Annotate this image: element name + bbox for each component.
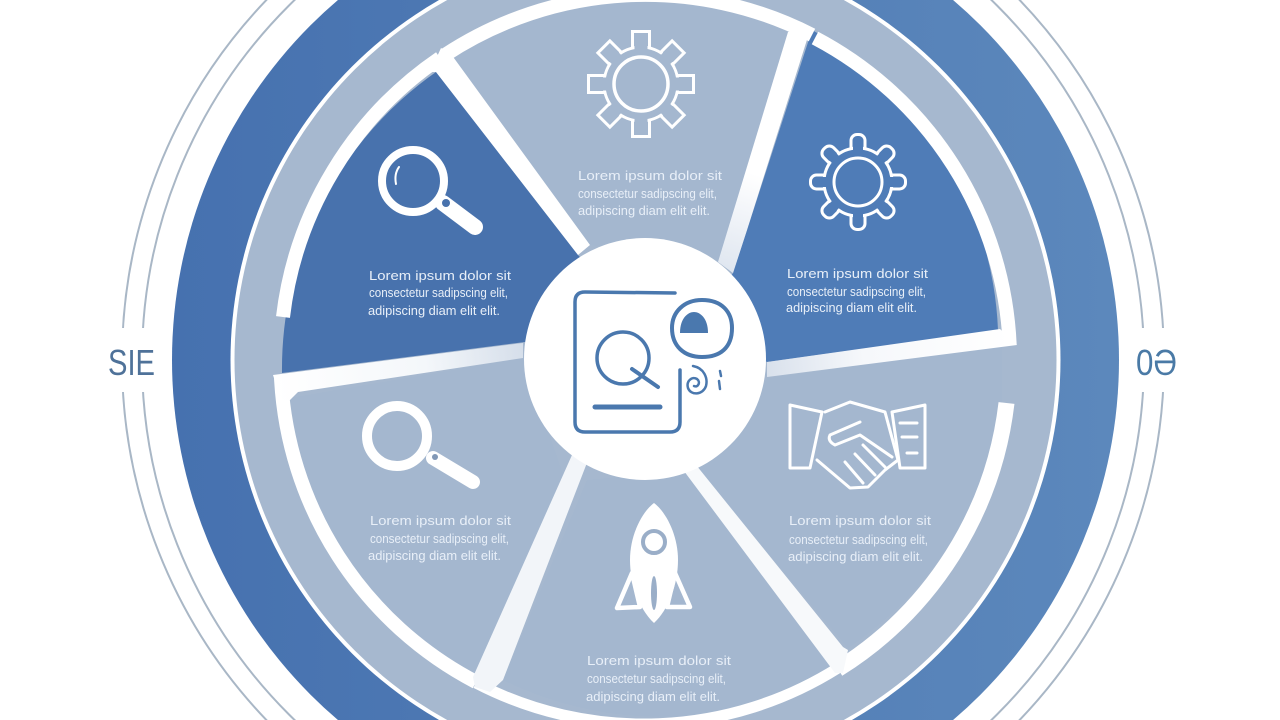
panel: bottom segment bbox=[503, 470, 835, 717]
segment outline arcs bbox=[281, 0, 1010, 720]
text block: top bbox=[578, 168, 722, 218]
text block: top left: adipiscing diam elit elit. bbox=[368, 303, 500, 318]
icon: outline gear bbox=[588, 32, 694, 136]
white hairline ring bbox=[230, 0, 1060, 720]
text block: lower left: adipiscing diam elit elit. bbox=[368, 548, 501, 563]
text block: top left: consectetur sadipscing elit, bbox=[369, 285, 508, 300]
icon: magnifying glass bbox=[382, 150, 475, 227]
blue outer ring bbox=[172, 0, 1119, 720]
text block: top right: Lorem ipsum dolor sit bbox=[787, 266, 928, 281]
panel: top left segment bbox=[282, 72, 620, 373]
text block: lower left: Lorem ipsum dolor sit bbox=[370, 513, 511, 528]
text block: bottom bbox=[586, 653, 731, 704]
text block: lower right: adipiscing diam elit elit. bbox=[788, 549, 923, 564]
text block: lower right bbox=[788, 513, 931, 564]
segment dividers bbox=[273, 27, 1017, 692]
text block: top left: Lorem ipsum dolor sit bbox=[369, 268, 511, 283]
right label: 0Ə bbox=[1136, 342, 1177, 383]
left label: SIE bbox=[108, 342, 155, 383]
panel: top segment bbox=[450, 0, 788, 262]
centre hub bbox=[524, 238, 766, 480]
text block: lower left bbox=[368, 513, 511, 563]
text block: bottom: adipiscing diam elit elit. bbox=[586, 689, 720, 704]
text block: bottom: consectetur sadipscing elit, bbox=[587, 671, 726, 686]
text block: top right bbox=[786, 266, 928, 315]
text block: lower right: consectetur sadipscing elit, bbox=[789, 532, 928, 547]
text block: lower left: consectetur sadipscing elit, bbox=[370, 531, 509, 546]
text block: top right: consectetur sadipscing elit, bbox=[787, 284, 926, 299]
text block: bottom: Lorem ipsum dolor sit bbox=[587, 653, 731, 668]
panel: lower right segment bbox=[698, 346, 1002, 648]
text block: top: Lorem ipsum dolor sit bbox=[578, 168, 722, 183]
panel: top right segment bbox=[700, 30, 998, 362]
icon: rounded gear bbox=[810, 134, 906, 230]
text block: top: consectetur sadipscing elit, bbox=[578, 186, 717, 201]
text block: lower right: Lorem ipsum dolor sit bbox=[789, 513, 931, 528]
icon: magnifying glass outline bbox=[367, 406, 473, 482]
icon: document with magnifier bbox=[575, 292, 732, 432]
grey inner disc bbox=[234, 0, 1056, 720]
text block: top: adipiscing diam elit elit. bbox=[578, 203, 710, 218]
text block: top left bbox=[368, 268, 511, 318]
icon: handshake bbox=[790, 402, 925, 488]
panel: lower left segment bbox=[290, 358, 565, 677]
icon: rocket bbox=[617, 503, 690, 623]
text block: top right: adipiscing diam elit elit. bbox=[786, 300, 917, 315]
